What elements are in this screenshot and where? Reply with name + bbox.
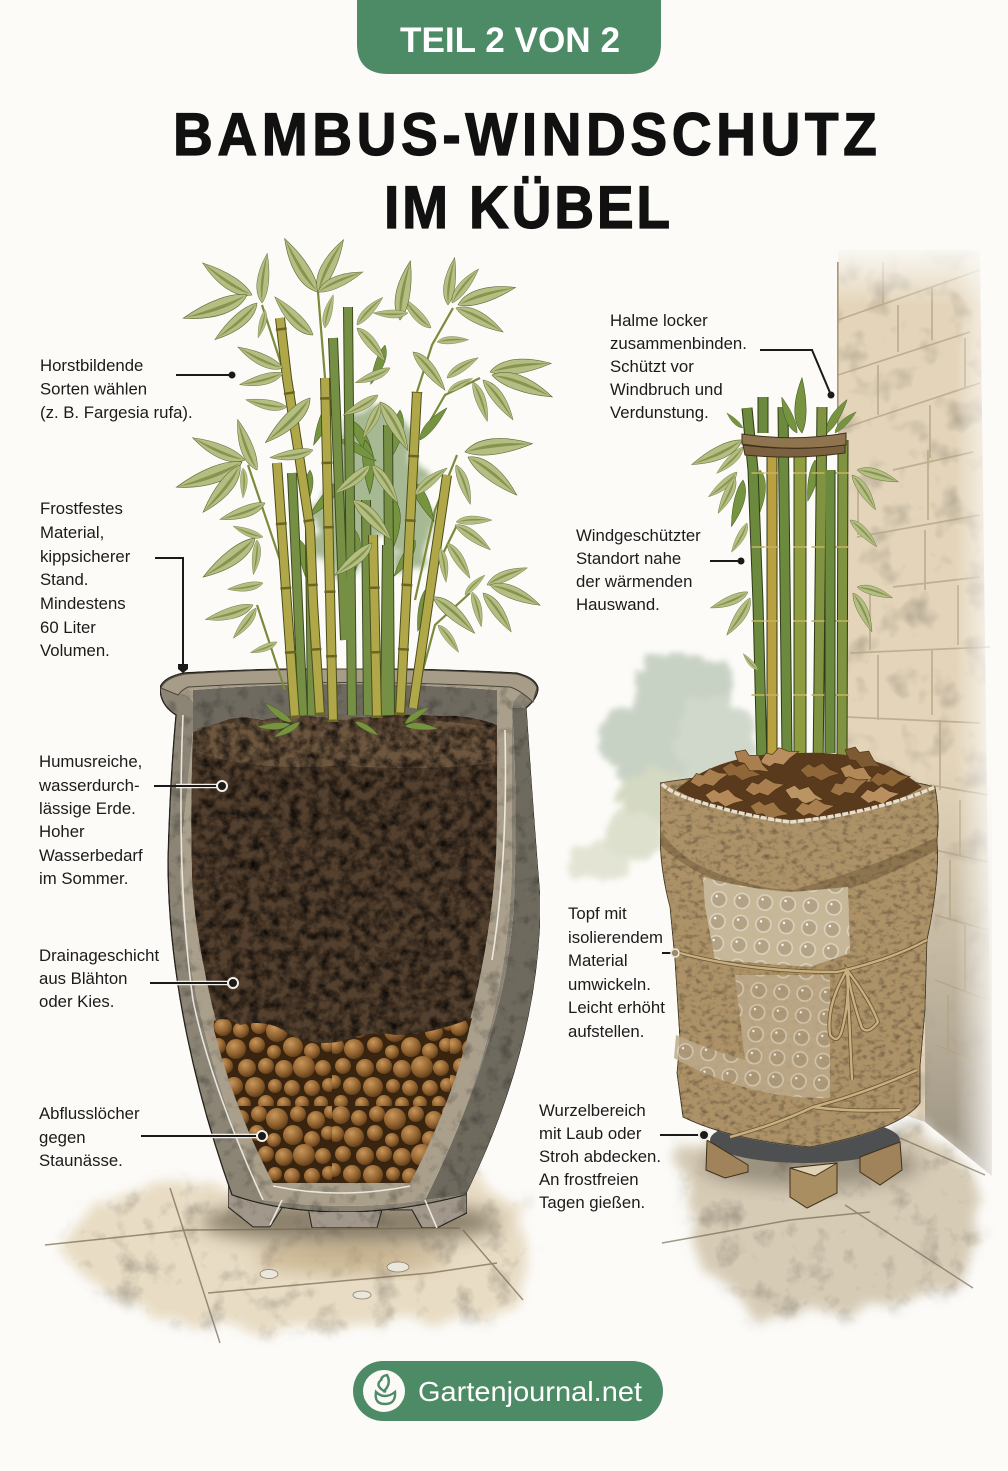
label: Topf umwickeln (568, 904, 679, 1041)
rope and bow (680, 940, 927, 1137)
burlap body (660, 774, 938, 1147)
brick house wall (830, 245, 1008, 1185)
label: Abflusslöcher: Staunässe. (39, 1151, 123, 1170)
left bamboo plant (174, 236, 555, 740)
label: Horstbildende Sorten: Sorten wählen (40, 380, 147, 398)
pot inner back wall (193, 684, 497, 740)
label: Wurzelbereich abdecken: mit Laub oder (539, 1124, 642, 1143)
label: Windgeschützter Standort: Standort nahe (576, 549, 681, 568)
label: Drainageschicht: Drainageschicht (39, 946, 159, 965)
soil layer (191, 715, 497, 1183)
label: Drainageschicht: aus Blähton (39, 969, 127, 988)
label: Humusreiche Erde: lässige Erde. (39, 799, 136, 818)
label: Humusreiche Erde: wasserdurch- (38, 776, 140, 795)
label: Topf umwickeln: Material (568, 951, 628, 970)
label: Humusreiche Erde (38, 752, 227, 888)
wrapped pot (660, 742, 938, 1208)
label: Abflusslöcher (39, 1104, 267, 1170)
pot rim (161, 669, 537, 702)
label: Humusreiche Erde: im Sommer. (39, 869, 128, 888)
background shrub (570, 650, 753, 880)
twine binding (742, 433, 846, 457)
label: Windgeschützter Standort: Hauswand. (576, 595, 660, 614)
label: Drainageschicht: oder Kies. (39, 992, 114, 1011)
title: BAMBUS-WINDSCHUTZ (173, 102, 877, 169)
label: Frostfestes Material: Volumen. (40, 641, 110, 660)
label: Wurzelbereich abdecken: Tagen gießen. (539, 1193, 645, 1212)
label: Topf umwickeln: aufstellen. (568, 1022, 644, 1041)
plant pot cross-section (160, 668, 540, 1228)
burlap top band shading (660, 830, 937, 892)
pot white edge highlights (181, 715, 505, 1228)
label: Humusreiche Erde: Wasserbedarf (39, 846, 143, 865)
right bamboo plant (690, 378, 900, 770)
label: Topf umwickeln: umwickeln. (568, 975, 651, 994)
tied bamboo leaves (690, 378, 900, 672)
label: Frostfestes Material (40, 499, 188, 673)
label: Halme zusammenbinden (610, 311, 834, 422)
clay pebble drainage layer (212, 1018, 472, 1183)
label: Topf umwickeln: Topf mit (568, 904, 627, 923)
pot outer shell (160, 668, 540, 1212)
label: Frostfestes Material: Stand. (40, 570, 88, 589)
saucer (710, 1117, 900, 1163)
icon: sprout in pot (363, 1370, 405, 1412)
dark foliage backdrop (315, 405, 436, 580)
label: Halme zusammenbinden: Windbruch und (610, 380, 723, 399)
wooden blocks (706, 1140, 902, 1208)
label: Wurzelbereich abdecken: Stroh abdecken. (539, 1147, 661, 1166)
bamboo side branches (248, 292, 480, 700)
badge: part 2 of 2: TEIL 2 VON 2 (400, 21, 620, 60)
label: Abflusslöcher: Abflusslöcher (39, 1104, 140, 1123)
label: Frostfestes Material: kippsicherer (40, 547, 131, 566)
footer logo pill (353, 1361, 663, 1421)
label: Horstbildende Sorten: (z. B. Fargesia rufa). (40, 403, 193, 422)
label: Humusreiche Erde: Hoher (39, 822, 85, 841)
grass at plant base (257, 701, 438, 740)
label: Wurzelbereich abdecken: An frostfreien (539, 1170, 639, 1189)
soil top highlight (196, 716, 495, 768)
footer logo pill: Gartenjournal.net (418, 1376, 642, 1407)
pot cut face (178, 680, 530, 1206)
label: Halme zusammenbinden: Verdunstung. (610, 403, 709, 422)
label: Horstbildende Sorten: Horstbildende (40, 356, 143, 375)
label: Frostfestes Material: Frostfestes (40, 499, 123, 518)
label: Topf umwickeln: isolierendem (568, 928, 663, 947)
label: Horstbildende Sorten (40, 356, 236, 422)
stone floor right (662, 1122, 985, 1321)
tied bamboo leaves behind (757, 459, 849, 512)
burlap rim (662, 784, 935, 822)
label: Wurzelbereich abdecken: Wurzelbereich (539, 1101, 646, 1120)
pot feet (228, 1180, 467, 1228)
label: Windgeschützter Standort: der wärmenden (576, 572, 692, 591)
label: Halme zusammenbinden: Halme locker (610, 311, 708, 330)
pot dark right outer face (425, 708, 540, 1200)
tied bamboo stalks (747, 397, 843, 770)
label: Topf umwickeln: Leicht erhöht (568, 998, 665, 1017)
label: Wurzelbereich abdecken (539, 1101, 709, 1212)
label: Windgeschützter Standort (576, 526, 744, 614)
bubble wrap upper (703, 877, 850, 967)
label: Halme zusammenbinden: zusammenbinden. (610, 334, 747, 353)
bamboo stalks (277, 307, 447, 722)
title: IM KÜBEL (384, 175, 670, 242)
mulch of dry leaves (676, 742, 922, 823)
label: Drainageschicht (39, 946, 238, 1011)
stone floor left (45, 1170, 535, 1343)
label: Abflusslöcher: gegen (39, 1128, 86, 1147)
dark background leaves (297, 344, 449, 632)
title (173, 102, 877, 242)
badge: part 2 of 2 (357, 0, 661, 74)
label: Frostfestes Material: Mindestens (40, 594, 126, 613)
label: Humusreiche Erde: Humusreiche, (39, 752, 142, 771)
label: Frostfestes Material: Material, (40, 523, 104, 542)
label: Windgeschützter Standort: Windgeschützter (576, 526, 701, 545)
water drops on floor (260, 1262, 409, 1299)
label: Frostfestes Material: 60 Liter (40, 618, 96, 637)
label: Halme zusammenbinden: Schützt vor (610, 357, 694, 376)
bubble wrap lower (674, 975, 830, 1098)
bamboo leaves (174, 236, 555, 657)
